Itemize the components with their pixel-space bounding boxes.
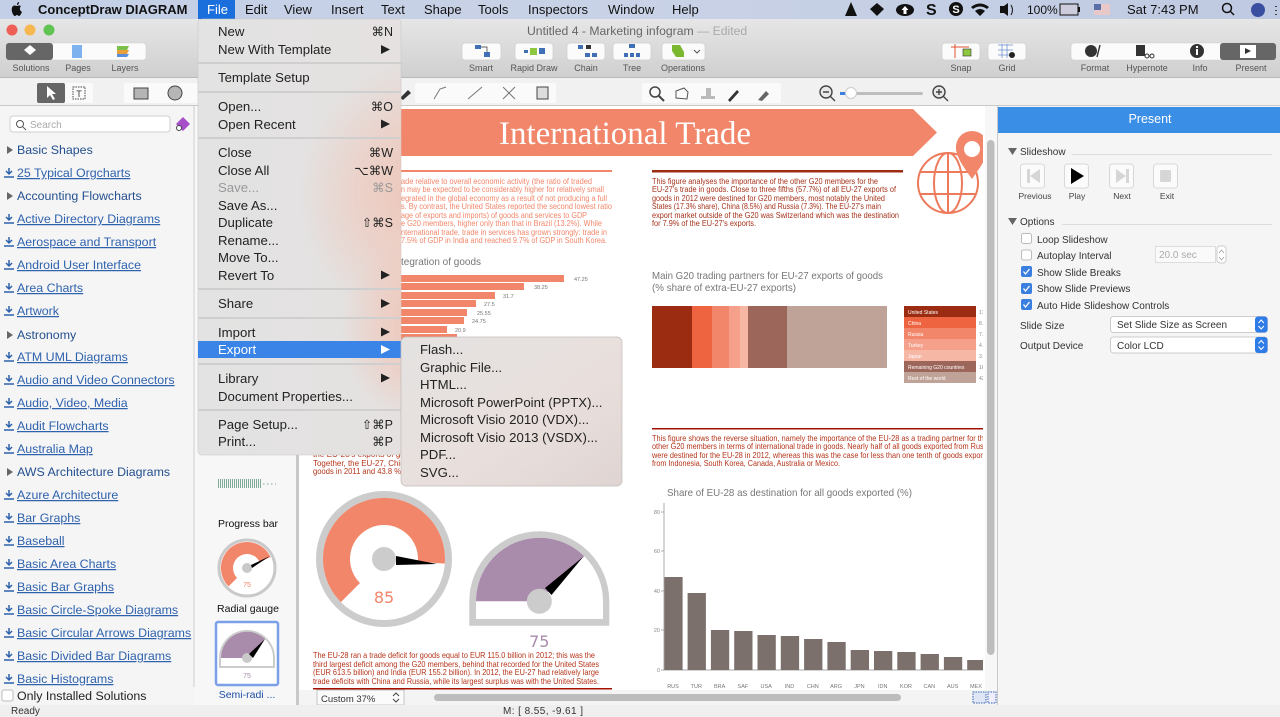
menu items: Close xyxy=(218,145,252,160)
app name: ConceptDraw DIAGRAM xyxy=(38,2,188,17)
solutions list items: Azure Architecture xyxy=(17,488,118,502)
text block: reverse situation: This figure shows the reverse situation, namely the importance of the EU-28 as a trading partner for the xyxy=(652,433,988,443)
stacked bar legend: 17.3 xyxy=(979,310,989,316)
text block: intro: 7.5% of GDP in India and reached 9.7% of GDP in South Korea. xyxy=(401,235,607,245)
menu items: New With Template xyxy=(218,42,331,57)
menu items: Template Setup xyxy=(218,70,310,85)
solutions pages layers segmented control: Solutions xyxy=(12,63,50,73)
drawing tools buttons: Rapid Draw xyxy=(510,63,558,73)
file menu highlighted: File xyxy=(207,2,228,17)
text block: G20 importance: This figure analyses the importance of the other G20 members for the xyxy=(652,176,878,186)
bar chart: share of EU-28: TUR xyxy=(691,684,702,690)
text block: reverse situation: other G20 members in terms of international trade in goods. Nearly half of all goods exported from Russia xyxy=(652,441,993,451)
bar chart: share of EU-28: 60 xyxy=(654,549,660,555)
bar chart: share of EU-28: USA xyxy=(761,684,772,690)
solutions list items: Basic Circular Arrows Diagrams xyxy=(17,626,191,640)
menu titles xyxy=(245,2,699,17)
export submenu: SVG... xyxy=(420,465,459,480)
solutions list items: Bar Graphs xyxy=(17,511,80,525)
bar chart: share of EU-28: IDN xyxy=(878,684,887,690)
selection tools xyxy=(37,83,93,103)
window controls xyxy=(6,24,54,36)
connector tools xyxy=(400,83,556,103)
chart title: share of EU-28: Share of EU-28 as destination for all goods exported (%) xyxy=(667,487,912,499)
title banner xyxy=(401,109,937,156)
text block: EU-28 exports fragment: goods in 2011 and 43.8 % xyxy=(313,466,401,476)
export highlighted item: Export xyxy=(218,342,256,357)
text block: intro: s. By contrast, the United States reported the second lowest ratio xyxy=(401,201,612,211)
solutions list items: Astronomy xyxy=(17,328,77,342)
text block: EU-28 exports fragment xyxy=(313,454,401,476)
bar chart: share of EU-28: CHN xyxy=(807,684,819,690)
menu items: Open... xyxy=(218,99,261,114)
menu items: New xyxy=(218,24,245,39)
menu shortcuts: ⌘S xyxy=(372,181,393,195)
icon: solution browser xyxy=(176,117,190,131)
progress bar caption: Progress bar xyxy=(218,518,279,530)
solutions list items: ATM UML Diagrams xyxy=(17,350,128,364)
bar chart: share of EU-28: BRA xyxy=(714,684,726,690)
bar chart: share of EU-28: 0 xyxy=(657,668,660,674)
solutions pages layers segmented control: Pages xyxy=(65,63,91,73)
menu titles: Text xyxy=(381,2,405,17)
export submenu xyxy=(401,337,622,486)
bar chart: share of EU-28: JPN xyxy=(854,684,865,690)
solutions list items: AWS Architecture Diagrams xyxy=(17,465,170,479)
snap and grid buttons xyxy=(942,43,1026,73)
solutions list items: Audio, Video, Media xyxy=(17,396,128,410)
semi-radial gauge caption: Semi-radi ... xyxy=(219,689,275,701)
menu items xyxy=(218,24,353,449)
radial gauge 85 xyxy=(320,494,448,624)
stacked bar legend xyxy=(904,306,989,383)
present header: Present xyxy=(1128,112,1172,126)
menu items: Revert To xyxy=(218,268,274,283)
text block: trade deficit: third largest deficit among the G20 members, behind that recorded for the United States xyxy=(313,659,599,669)
stacked bar legend: 4.7 xyxy=(979,343,986,349)
chart title: integration of goods: tegration of goods xyxy=(401,256,481,268)
menu items: Document Properties... xyxy=(218,389,353,404)
zoom slider xyxy=(820,86,948,101)
solutions list items: Basic Shapes xyxy=(17,143,93,157)
snap and grid buttons: Grid xyxy=(998,63,1016,73)
text block: trade deficit: The EU-28 ran a trade deficit for goods equal to EUR 115.0 billion in 2012; this was the xyxy=(313,650,595,660)
slideshow section heading xyxy=(1008,147,1272,158)
bar chart: integration of goods: 25.55 xyxy=(477,311,491,317)
format hypernote info present control: Format xyxy=(1081,63,1110,73)
solutions list items: Area Charts xyxy=(17,281,83,295)
stacked bar legend: 16.7 xyxy=(979,365,989,371)
mini progress bar xyxy=(218,479,276,488)
bar chart: share of EU-28: 20 xyxy=(654,628,660,634)
text block: trade deficit: (EUR 613.5 billion) and India (EUR 155.2 billion). In 2012, the EU-27 had relatively large xyxy=(313,667,599,677)
vertical scrollbar xyxy=(985,106,997,691)
text block: reverse situation: from Indonesia, South Korea, Canada, Australia or Mexico. xyxy=(652,458,840,468)
clock: Sat 7:43 PM xyxy=(1127,2,1199,17)
icon: battery xyxy=(1060,4,1080,15)
bar chart: share of EU-28: MEX xyxy=(970,684,982,690)
solutions list items: Audio and Video Connectors xyxy=(17,373,175,387)
format hypernote info present control: Present xyxy=(1235,63,1267,73)
export submenu: Flash... xyxy=(420,342,463,357)
secondary toolbar xyxy=(0,78,1280,106)
shape tools xyxy=(124,83,198,103)
left panel: solutions list xyxy=(0,106,195,705)
menu items: Duplicate xyxy=(218,215,273,230)
battery percent: 100% xyxy=(1027,3,1058,17)
icon: apple logo xyxy=(12,2,22,16)
stacked bar legend: United States xyxy=(908,310,939,316)
bar chart: integration of goods: 38.25 xyxy=(534,285,548,291)
solutions list items: Basic Area Charts xyxy=(17,557,116,571)
stacked bar legend: Japan xyxy=(908,354,922,360)
options checkboxes xyxy=(1021,234,1169,312)
text block: reverse situation xyxy=(652,435,983,467)
stacked bar legend: Remaining G20 countries xyxy=(908,365,965,371)
status icons: S xyxy=(926,2,937,19)
menu titles: Insert xyxy=(331,2,364,17)
search field: Search xyxy=(30,120,62,131)
bar chart: integration of goods: 24.75 xyxy=(472,319,486,325)
submenu arrows xyxy=(381,45,390,382)
text block: reverse situation: were destined for the EU-28 in 2012, whereas this was the case for less than one tenth of goods exported xyxy=(651,450,993,460)
text block: G20 importance: goods in 2012 were destined for G20 members, most notably the United xyxy=(652,193,885,203)
selection tools: T xyxy=(76,89,82,99)
drawing tools buttons: Tree xyxy=(623,63,641,73)
stacked bar legend: Russia xyxy=(908,332,924,338)
stacked bar legend: 7.3 xyxy=(979,332,986,338)
slideshow buttons: Exit xyxy=(1160,191,1175,201)
text block: EU-28 exports fragment: the EU-28's exports of goods xyxy=(313,449,418,459)
stacked bar legend: Rest of the world xyxy=(908,376,946,382)
search field xyxy=(10,116,170,132)
menu shortcuts: ⌘N xyxy=(371,25,393,39)
icon: globe with map pin xyxy=(918,131,988,213)
menu items: Rename... xyxy=(218,233,279,248)
present header xyxy=(998,107,1280,133)
menu shortcuts: ⌥⌘W xyxy=(354,164,393,178)
icon: flag xyxy=(1094,4,1110,15)
chart title: main G20 trading partners: Main G20 trading partners for EU-27 exports of goods xyxy=(652,270,883,282)
menu separators xyxy=(198,62,401,411)
autoplay interval field xyxy=(1156,246,1226,263)
status bar xyxy=(0,705,1280,717)
solutions list items: Android User Interface xyxy=(17,258,141,272)
text block: G20 importance: EU-27's trade in goods. Close to three fifths (57.7%) of all EU-27 exports of xyxy=(652,184,897,194)
title bar and main toolbar xyxy=(0,19,1280,78)
export submenu: Microsoft Visio 2013 (VSDX)... xyxy=(420,430,598,445)
bar chart: share of EU-28: AUS xyxy=(947,684,959,690)
fit page icons xyxy=(973,692,996,703)
solutions list items: Baseball xyxy=(17,534,65,548)
solutions list items: Accounting Flowcharts xyxy=(17,189,142,203)
menu titles: Inspectors xyxy=(528,2,588,17)
bar chart: share of EU-28: 40 xyxy=(654,589,660,595)
slide size select xyxy=(1020,316,1268,332)
text block: EU-28 exports fragment: Together, the EU-27, China xyxy=(313,458,409,468)
slideshow buttons: Next xyxy=(1113,191,1131,201)
drawing tools buttons xyxy=(462,43,706,73)
menu titles: Edit xyxy=(245,2,268,17)
stacked bar chart xyxy=(652,306,887,368)
text block: trade deficit xyxy=(313,650,599,686)
bar chart: integration of goods: 31.7 xyxy=(503,294,514,300)
bar chart: integration of goods: 47.25 xyxy=(574,277,588,283)
icon: search and siri xyxy=(1222,3,1276,17)
rule bottom xyxy=(313,688,612,690)
bar chart: integration of goods: 20.9 xyxy=(455,328,466,334)
status icons: S xyxy=(952,4,960,16)
selected semi-radial gauge thumbnail xyxy=(216,622,278,685)
solutions list items: Basic Bar Graphs xyxy=(17,580,114,594)
solutions list items: Australia Map xyxy=(17,442,93,456)
file menu dropdown xyxy=(198,18,402,456)
output device select xyxy=(1020,337,1268,353)
export submenu: Microsoft Visio 2010 (VDX)... xyxy=(420,412,589,427)
radial gauge 85: 85 xyxy=(374,588,394,607)
only installed solutions checkbox: Only Installed Solutions xyxy=(17,689,146,703)
format hypernote info present control: Info xyxy=(1192,63,1208,73)
semi-radial gauge 75: 75 xyxy=(529,632,549,651)
menu titles: Window xyxy=(608,2,655,17)
options checkboxes: Loop Slideshow xyxy=(1037,235,1108,246)
menu shortcuts: ⇧⌘P xyxy=(362,418,393,432)
menu shortcuts: ⌘P xyxy=(372,435,393,449)
radial gauge caption: Radial gauge xyxy=(217,603,279,615)
rule reverse situation xyxy=(652,428,983,430)
menu titles: Shape xyxy=(424,2,462,17)
text block: intro: age of exports and imports) of goods and services to GDP xyxy=(401,210,587,220)
title banner: International Trade xyxy=(499,116,751,152)
bar chart: share of EU-28: SAF xyxy=(738,684,749,690)
menu items: Import xyxy=(218,325,256,340)
slideshow buttons: Play xyxy=(1069,191,1086,201)
solutions pages layers segmented control: Layers xyxy=(111,63,139,73)
export highlighted item xyxy=(198,341,401,358)
stacked bar legend: 8.5 xyxy=(979,321,986,327)
menu items: Move To... xyxy=(218,250,279,265)
drawing tools buttons: Chain xyxy=(574,63,598,73)
status bar: M: [ 8.55, -9.61 ] xyxy=(503,706,583,717)
bar chart: share of EU-28: CAN xyxy=(923,684,935,690)
library panel: gauges xyxy=(195,106,299,705)
only installed solutions checkbox xyxy=(0,687,195,705)
drawing tools buttons: Operations xyxy=(661,63,706,73)
solutions list items: Artwork xyxy=(17,304,60,318)
file menu highlighted xyxy=(198,0,235,19)
text block: intro: egrated in the global economy as a result of not producing a full xyxy=(401,193,607,203)
menu shortcuts: ⇧⌘S xyxy=(362,216,393,230)
options checkboxes: Auto Hide Slideshow Controls xyxy=(1037,301,1169,312)
slideshow buttons xyxy=(1018,164,1178,201)
bar chart: share of EU-28: 80 xyxy=(654,510,660,516)
mini radial gauge xyxy=(219,540,275,596)
menu items: Save As... xyxy=(218,198,277,213)
export submenu: HTML... xyxy=(420,377,467,392)
bar chart: integration of goods: 27.5 xyxy=(484,302,495,308)
stacked bar legend: China xyxy=(908,321,921,327)
right panel: present xyxy=(997,106,1280,705)
horizontal scrollbar xyxy=(434,694,901,701)
menu shortcuts: ⌘O xyxy=(371,100,393,114)
options section heading xyxy=(1008,217,1272,228)
slideshow section heading: Slideshow xyxy=(1020,147,1066,158)
solutions list items: Basic Divided Bar Diagrams xyxy=(17,649,171,663)
stacked bar legend: 3.2 xyxy=(979,354,986,360)
text block: intro xyxy=(401,176,612,245)
bar chart: share of EU-28: KOR xyxy=(900,684,912,690)
stacked bar legend: Turkey xyxy=(908,343,924,349)
solutions list items: 25 Typical Orgcharts xyxy=(17,166,130,180)
slideshow buttons: Previous xyxy=(1018,191,1052,201)
canvas area xyxy=(299,106,993,691)
status bar: Ready xyxy=(11,706,40,717)
solutions list items: Audit Flowcharts xyxy=(17,419,109,433)
zoom selector xyxy=(317,690,404,705)
text block: intro: ade relative to overall economic activity (the ratio of traded xyxy=(401,176,592,186)
output device select: Output Device xyxy=(1020,341,1084,352)
solutions list items: Active Directory Diagrams xyxy=(17,212,160,226)
slide size select: Set Slide Size as Screen xyxy=(1117,320,1227,331)
text block: intro: e G20 members, higher only than that in Brazil (13.2%). While xyxy=(401,218,602,228)
bar chart: share of EU-28: IND xyxy=(785,684,794,690)
text block: G20 importance xyxy=(652,176,899,228)
selected semi-radial gauge thumbnail: 75 xyxy=(243,673,251,680)
text block: intro: n may be expected to be considerably higher for relatively small xyxy=(401,184,604,194)
output device select: Color LCD xyxy=(1117,341,1164,352)
view tools xyxy=(642,83,781,103)
chart title: main G20 trading partners xyxy=(652,272,883,293)
bar chart: share of EU-28 xyxy=(654,503,983,690)
stacked bar legend: 42.3 xyxy=(979,376,989,382)
bottom bar: zoom and horizontal scrollbar xyxy=(299,690,997,705)
text block: G20 importance: for 7.9% of the EU-27's exports. xyxy=(652,218,756,228)
export submenu: Microsoft PowerPoint (PPTX)... xyxy=(420,395,602,410)
solutions list items: Basic Histograms xyxy=(17,672,113,686)
solutions list items xyxy=(4,143,191,686)
menu items: Print... xyxy=(218,434,256,449)
solutions pages layers segmented control xyxy=(6,43,146,73)
menu bar xyxy=(0,0,1280,19)
export submenu: PDF... xyxy=(420,447,456,462)
text block: G20 importance: export market outside of the G20 was Switzerland which was the destination xyxy=(652,210,899,220)
zoom selector: Custom 37% xyxy=(321,694,376,705)
menu items: Open Recent xyxy=(218,117,296,132)
text block: G20 importance: States (17.3% share), China (8.5%) and Russia (7.3%). The EU-27's main xyxy=(652,201,881,211)
export submenu: Graphic File... xyxy=(420,360,502,375)
format hypernote info present control xyxy=(1071,43,1276,73)
status icons xyxy=(845,2,1012,19)
document title: Untitled 4 - Marketing infogram — Edited xyxy=(527,24,747,38)
solutions list items: Basic Circle-Spoke Diagrams xyxy=(17,603,178,617)
menu titles: Help xyxy=(672,2,699,17)
options section heading: Options xyxy=(1020,217,1054,228)
bar chart: integration of goods xyxy=(401,275,588,340)
menu shortcuts xyxy=(354,25,393,449)
slide size select: Slide Size xyxy=(1020,321,1065,332)
format hypernote info present control: Hypernote xyxy=(1126,63,1168,73)
menu titles: View xyxy=(284,2,313,17)
menu shortcuts: ⌘W xyxy=(369,146,393,160)
semi-radial gauge 75 xyxy=(469,531,609,651)
bar chart: share of EU-28: RUS xyxy=(667,684,679,690)
autoplay interval field: 20.0 sec xyxy=(1159,250,1197,261)
menu titles: Tools xyxy=(478,2,509,17)
drawing tools buttons: Smart xyxy=(469,63,493,73)
menu items: Share xyxy=(218,296,253,311)
menu items: Library xyxy=(218,371,259,386)
snap and grid buttons: Snap xyxy=(950,63,972,73)
solutions list items: Aerospace and Transport xyxy=(17,235,157,249)
menu items: Close All xyxy=(218,163,269,178)
text block: intro: nternational trade, trade in services has grown strongly: trade in xyxy=(401,227,607,237)
menu items: Save... xyxy=(218,180,259,195)
options checkboxes: Show Slide Previews xyxy=(1037,284,1130,295)
mini radial gauge: 75 xyxy=(243,582,251,589)
options checkboxes: Autoplay Interval xyxy=(1037,251,1112,262)
bar chart: share of EU-28: ARG xyxy=(830,684,842,690)
intro rule left xyxy=(400,170,612,172)
chart title: main G20 trading partners: (% share of extra-EU-27 exports) xyxy=(652,282,796,294)
rule right xyxy=(652,170,903,172)
options checkboxes: Show Slide Breaks xyxy=(1037,268,1121,279)
text block: trade deficit: trade deficits with China and Russia, while its largest surplus was with the United States. xyxy=(313,676,599,686)
menu items: Page Setup... xyxy=(218,417,298,432)
